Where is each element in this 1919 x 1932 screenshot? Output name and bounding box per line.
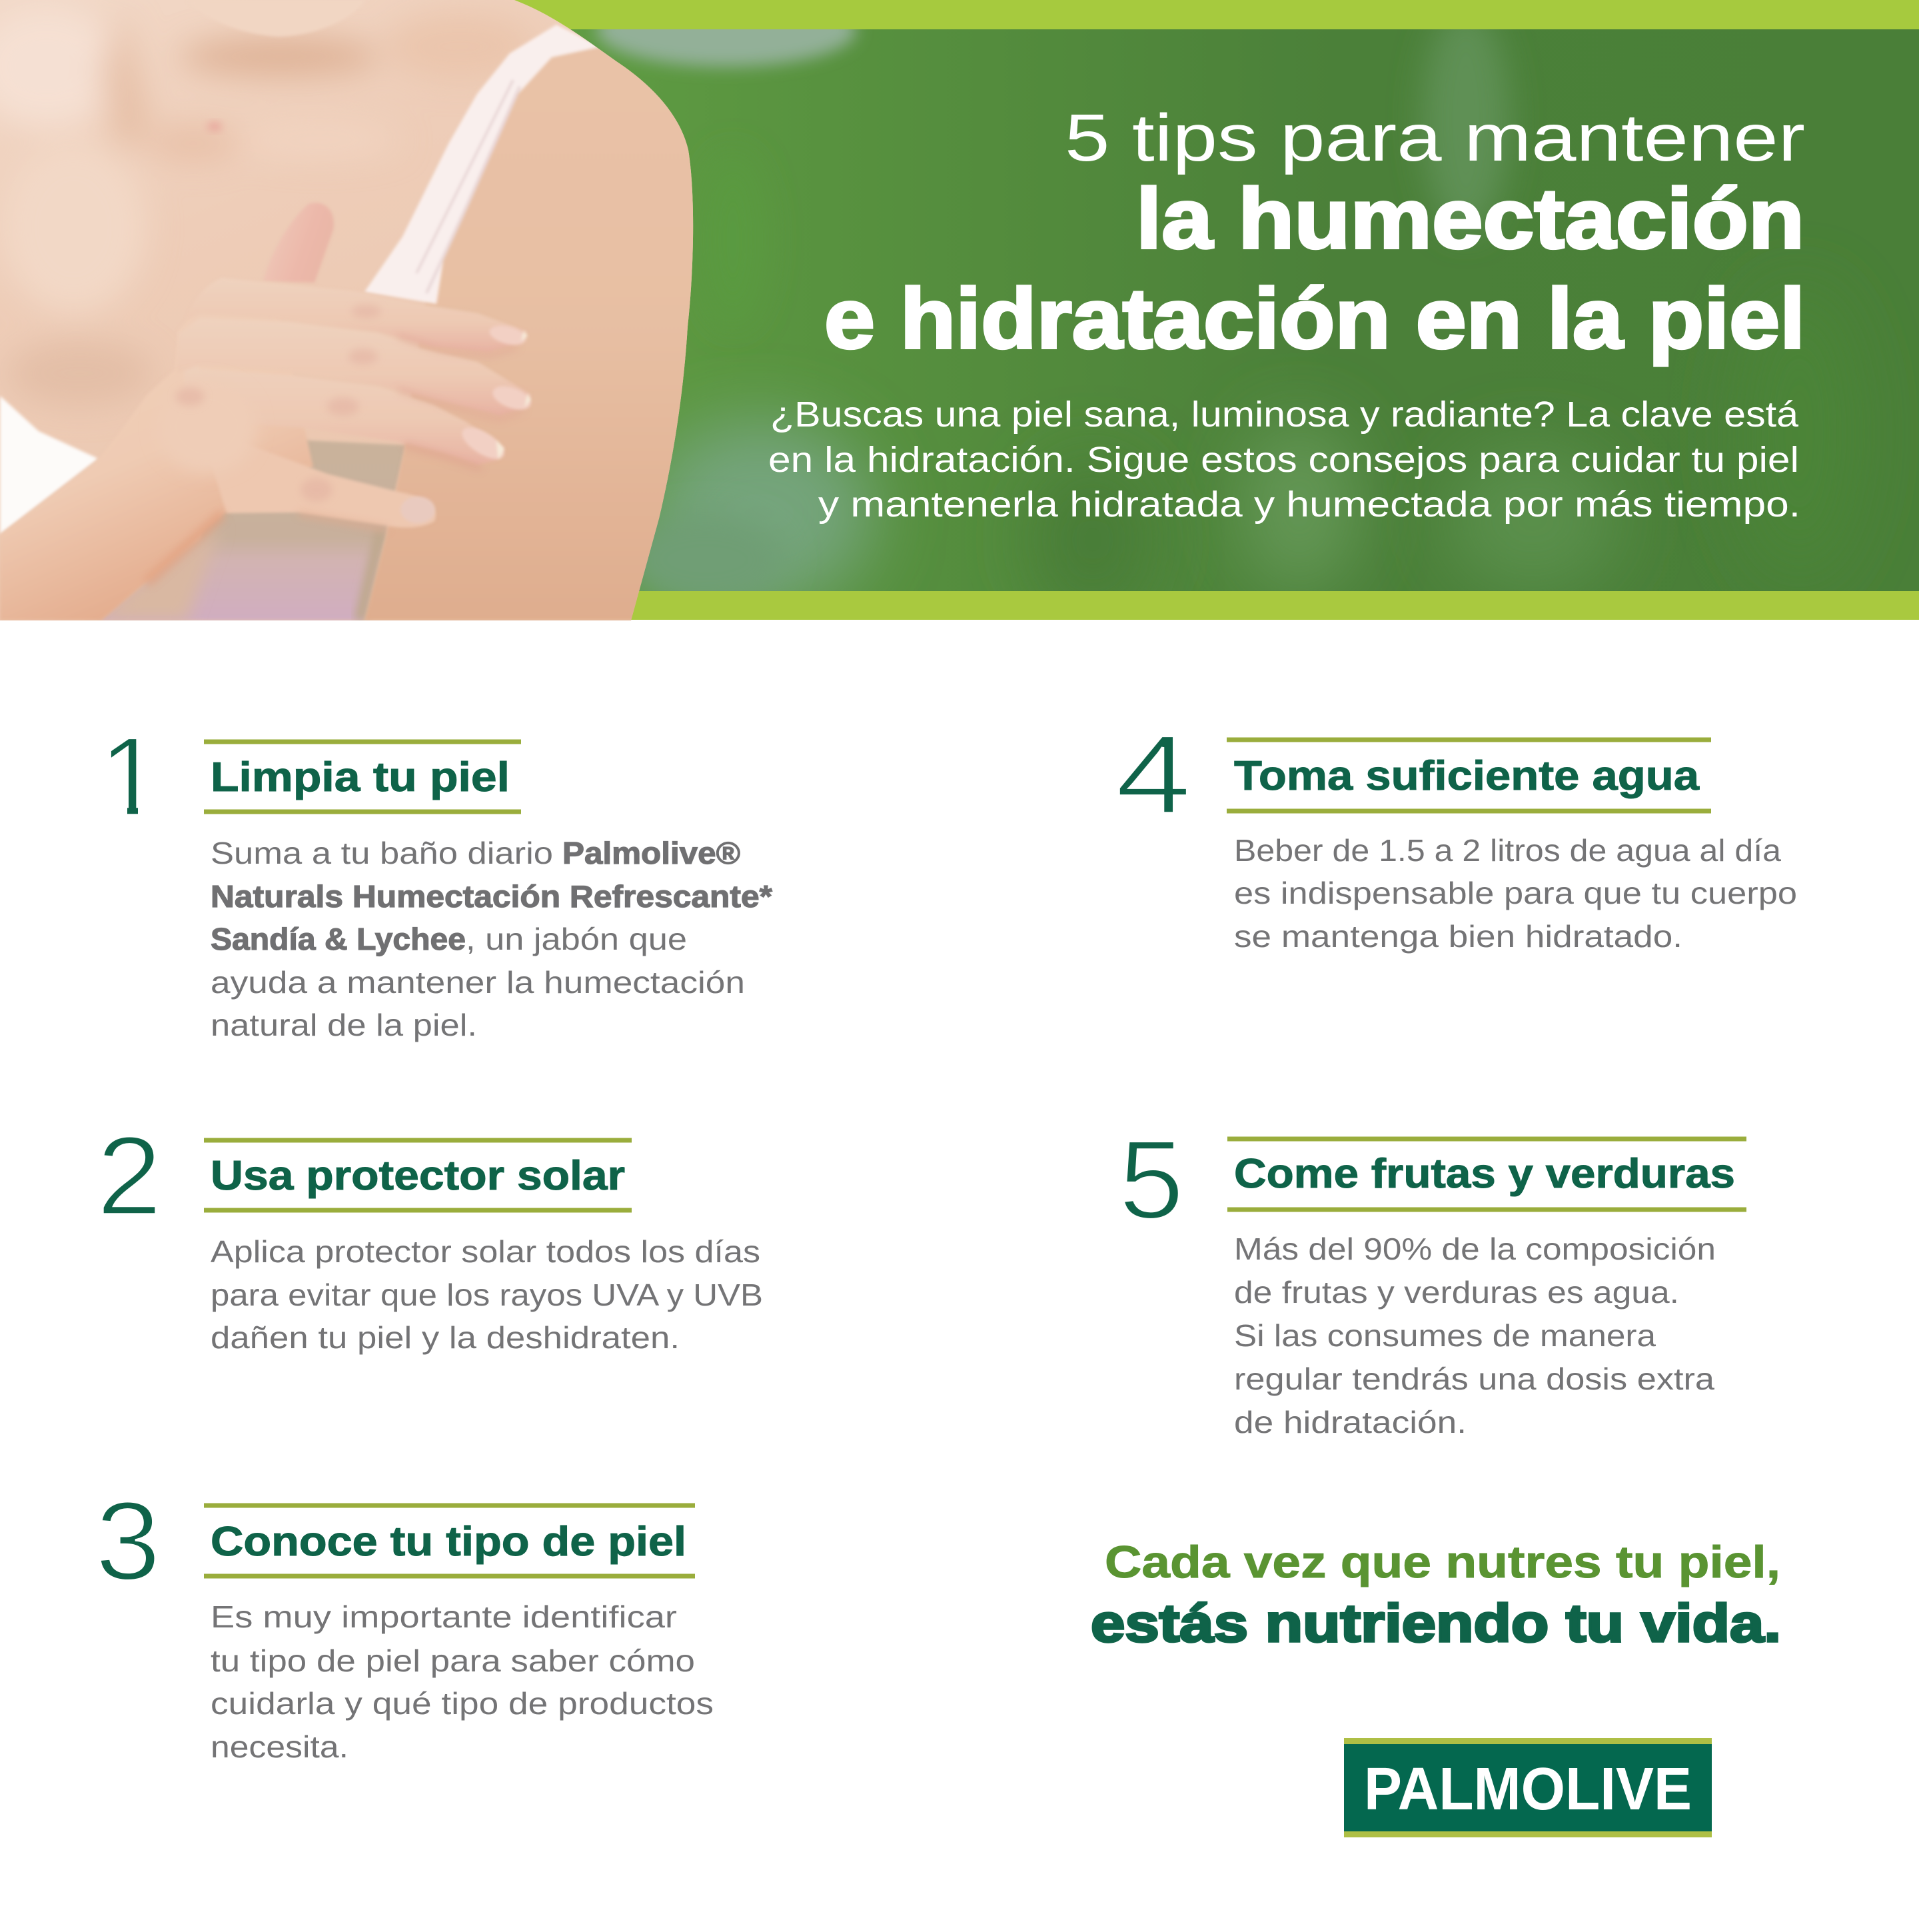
body 5: de hidratación.: [1234, 1405, 1467, 1440]
heading rules 2: [204, 1140, 632, 1210]
garment side shadow: [360, 530, 381, 620]
number 1: 1: [99, 714, 161, 839]
neck and chin: [207, 18, 337, 133]
intro text: en la hidratación. Sigue estos consejos para cuidar tu piel: [768, 440, 1799, 480]
tagline line 2: estás nutriendo tu vida.: [1091, 1593, 1781, 1653]
body 5: Si las consumes de manera: [1234, 1318, 1656, 1353]
top accent bar: [506, 0, 1919, 29]
intro text: ¿Buscas una piel sana, luminosa y radiante? La clave está: [770, 395, 1799, 435]
title: [824, 101, 1805, 367]
intro text: y mantenerla hidratada y humectada por más tiempo.: [818, 484, 1800, 524]
tip 2: [97, 1113, 763, 1355]
heading 2: Usa protector solar: [211, 1153, 625, 1199]
number 3: 3: [95, 1478, 161, 1603]
tip 5: [1119, 1117, 1746, 1440]
body 2: Aplica protector solar todos los días: [211, 1234, 760, 1269]
body 4: se mantenga bien hidratado.: [1234, 919, 1682, 954]
body 3: cuidarla y qué tipo de productos: [211, 1686, 714, 1721]
body 5: Más del 90% de la composición: [1234, 1232, 1716, 1266]
body 4: [1234, 833, 1797, 954]
logo: Palmolive: [1344, 1738, 1712, 1837]
heading rules 5: [1227, 1139, 1746, 1210]
heading 1: Limpia tu piel: [211, 754, 510, 800]
body 1: Suma a tu baño diario: [211, 836, 553, 870]
logo: Palmolive: PALMOLIVE: [1364, 1756, 1692, 1823]
garment left tan shading: [105, 538, 212, 620]
tip 3: [95, 1478, 714, 1764]
intro text: [768, 395, 1800, 524]
title line 2: la humectación: [1136, 171, 1804, 267]
title line 3: e hidratación en la piel: [824, 271, 1805, 367]
tagline line 1: Cada vez que nutres tu piel,: [1105, 1537, 1780, 1587]
tip 1: [99, 714, 772, 1042]
body 1: Palmolive®: [562, 836, 740, 870]
lilac garment bottom: [100, 437, 406, 620]
body 5: de frutas y verduras es agua.: [1234, 1275, 1679, 1310]
heading 3: Conoce tu tipo de piel: [211, 1519, 686, 1565]
number 5: 5: [1119, 1117, 1184, 1242]
body 3: Es muy importante identificar: [211, 1599, 677, 1634]
body 2: [211, 1234, 763, 1355]
hand back and wrist: [0, 429, 313, 620]
bottom accent bar: [620, 591, 1919, 620]
heading 4: Toma suficiente agua: [1234, 753, 1700, 799]
photo: arm and hand: [0, 0, 706, 620]
body 5: regular tendrás una dosis extra: [1234, 1362, 1714, 1396]
heading rules 1: [204, 742, 521, 812]
thumb: [263, 203, 334, 283]
body 1: ayuda a mantener la humectación: [211, 965, 745, 1000]
body 1: Sandía & Lychee: [211, 922, 466, 956]
number 4: 4: [1115, 712, 1191, 837]
body 2: dañen tu piel y la deshidraten.: [211, 1320, 680, 1355]
knuckles: [175, 305, 381, 502]
upper arm: [365, 27, 706, 620]
tip 4: [1115, 712, 1797, 954]
number 2: 2: [97, 1113, 162, 1238]
fingers: [177, 278, 531, 465]
body 4: es indispensable para que tu cuerpo: [1234, 876, 1797, 910]
heading rules 3: [204, 1505, 695, 1576]
heading 5: Come frutas y verduras: [1234, 1151, 1735, 1197]
body 1: [211, 836, 772, 1042]
shadow under fingers: [150, 337, 523, 580]
heading rules 4: [1227, 740, 1711, 811]
body 3: necesita.: [211, 1729, 348, 1764]
header banner background: [570, 29, 1919, 591]
body 5: [1234, 1232, 1716, 1440]
white strap: [364, 25, 601, 304]
white garment left: [0, 396, 98, 534]
tagline: [1091, 1537, 1781, 1653]
body 1: natural de la piel.: [211, 1008, 477, 1042]
fingernails: [400, 323, 534, 523]
body 1: Naturals Humectación Refrescante*: [211, 879, 772, 914]
title line 1: 5 tips para mantener: [1065, 101, 1805, 175]
pinky finger: [200, 427, 436, 528]
body 3: tu tipo de piel para saber cómo: [211, 1643, 695, 1678]
body 4: Beber de 1.5 a 2 litros de agua al día: [1234, 833, 1781, 868]
hand back blend: [157, 380, 257, 473]
body 2: para evitar que los rayos UVA y UVB: [211, 1278, 763, 1312]
body 3: [211, 1599, 714, 1764]
body 1: , un jabón que: [466, 922, 687, 956]
